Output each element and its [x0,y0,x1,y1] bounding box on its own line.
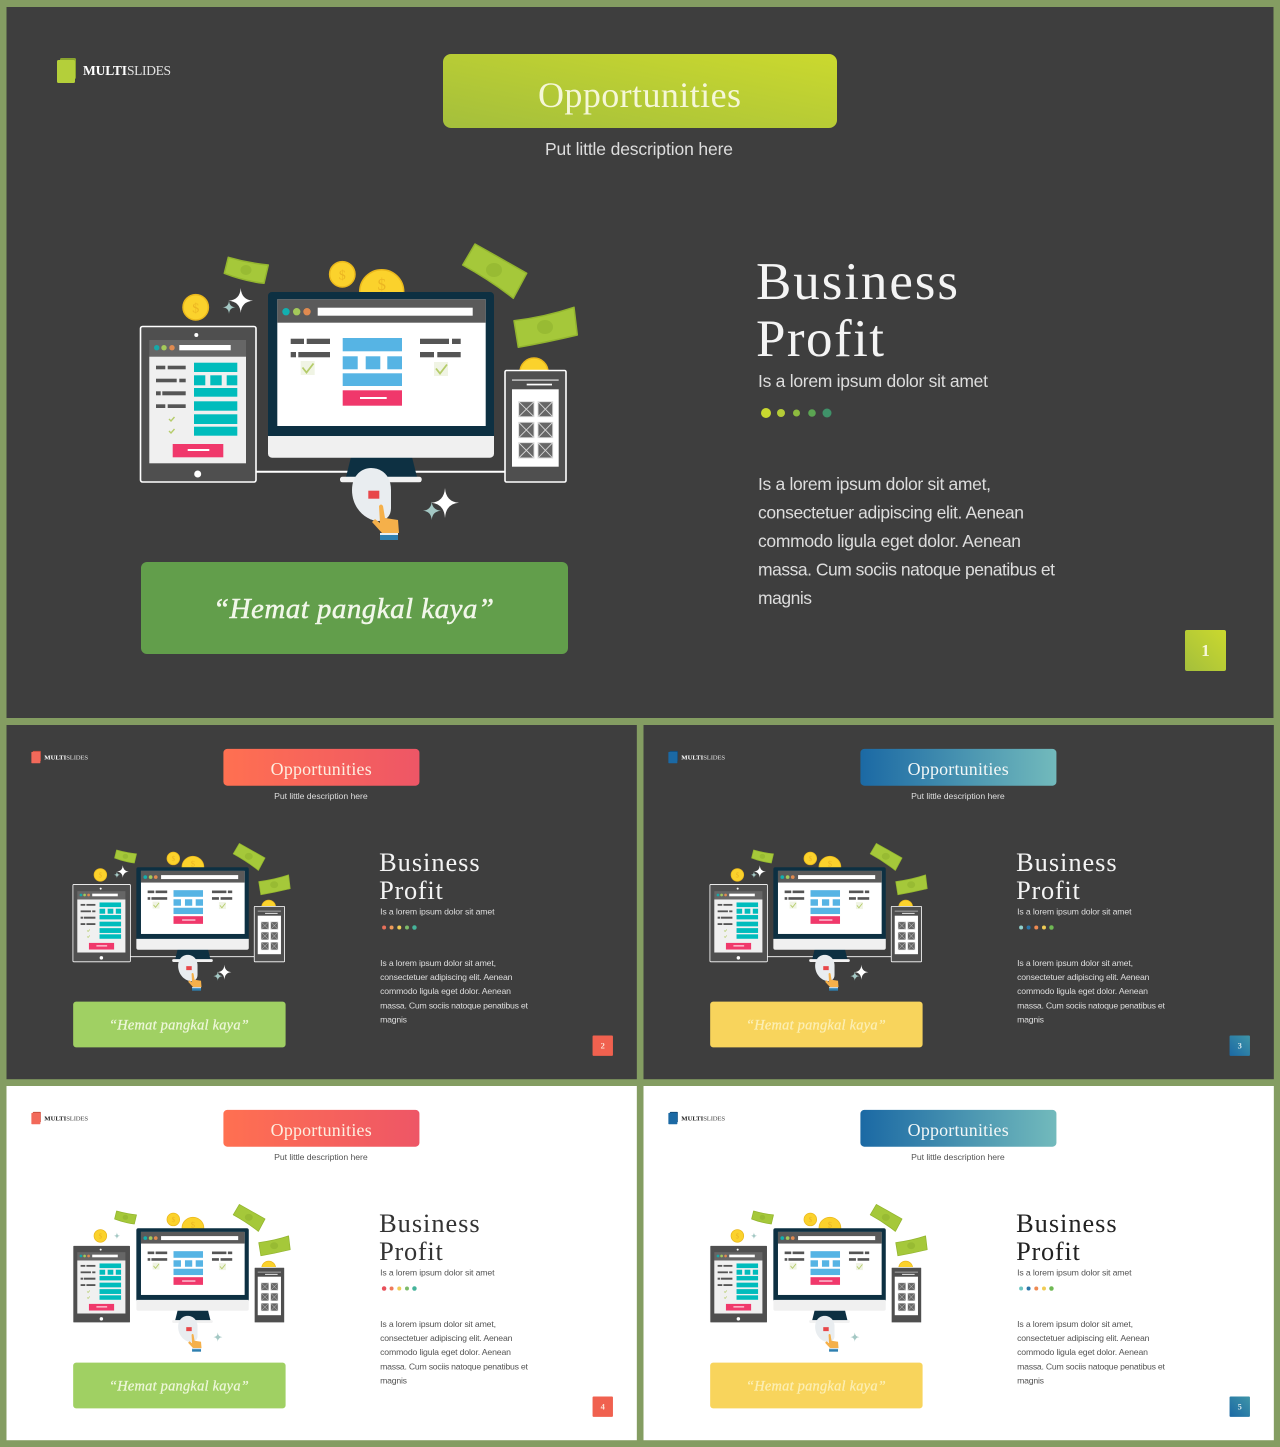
slide 4 page number [593,1396,613,1417]
slide 1 logo: MULTI [83,63,127,78]
slide 2 dots [382,925,417,930]
slide 4 heading: Business [379,1209,480,1238]
slide 2 body text: Is a lorem ipsum dolor sit amet, [380,958,496,968]
slide 5 page number: 5 [1238,1401,1242,1411]
connector lines [256,471,505,473]
slide 3 subtitle: Is a lorem ipsum dolor sit amet [1017,907,1132,917]
slide 5: light blue and yellow theme [644,1086,1274,1440]
slide 1 body text: massa. Cum sociis natoque penatibus et [758,560,1055,580]
slide 3 quote box: “Hemat pangkal kaya” [746,1017,886,1033]
slide 4 illustration [73,1204,290,1352]
slide 2 logo: SLIDES [66,754,88,761]
slide 2 heading: Profit [379,876,443,905]
slide 5 dots [1019,1286,1054,1291]
slide 3 body text [1017,958,1165,1025]
slide 3 logo: SLIDES [703,754,725,761]
slide 1 page number [1185,630,1226,671]
slide 1 heading: Profit [756,310,884,368]
slide 3 page number [1230,1035,1250,1056]
slide 4 page number: 4 [601,1401,606,1411]
slide 2: dark red and green theme [6,725,637,1079]
pointing hand [352,468,399,540]
slide 1 body text: magnis [758,588,812,608]
banknote 1 [224,257,268,283]
coins behind devices: $ [377,275,386,294]
tablet [140,326,256,482]
slide 1 page number: 1 [1201,641,1210,660]
slide 1 logo [57,58,171,83]
slide 1 background [6,7,1274,718]
slide 2 page number: 2 [601,1040,605,1050]
slide 5 heading [1016,1209,1117,1266]
slide 3 background [644,725,1274,1079]
slide 5 title banner: Opportunities [908,1120,1009,1140]
slide 2 body text [380,958,528,1025]
slide 5 quote box: “Hemat pangkal kaya” [746,1378,886,1394]
coins behind devices: $ [339,268,346,284]
slide 5 logo [668,1112,725,1124]
slide 2 subtitle: Is a lorem ipsum dolor sit amet [380,907,495,917]
banknote 2 [463,244,527,298]
illustration: devices with money [140,244,577,540]
slide 1 dots [761,408,832,418]
slide 3 body text: massa. Cum sociis natoque penatibus et [1017,1000,1165,1010]
slide 1 logo: SLIDES [127,63,171,78]
slide 3 logo [668,751,725,763]
slide 2 page number [593,1035,613,1056]
slide 5 body text: consectetuer adipiscing elit. Aenean [1017,1333,1150,1343]
slide 2 quote box [73,1002,286,1047]
slide 2 title banner [223,749,419,786]
slide 3 body text: magnis [1017,1015,1045,1025]
slide 5 body text: magnis [1017,1376,1045,1386]
slide 3 logo: MULTI [681,754,704,761]
slide 2 illustration [73,843,290,991]
slide 5 heading: Profit [1016,1237,1080,1266]
slide 2 body text: massa. Cum sociis natoque penatibus et [380,1000,528,1010]
slide 3: dark blue and yellow theme [644,725,1274,1079]
slide 5 body text: Is a lorem ipsum dolor sit amet, [1017,1319,1133,1329]
slide 2 body text: commodo ligula eget dolor. Aenean [380,986,511,996]
slide 3 page number: 3 [1238,1040,1242,1050]
slide 3 heading [1016,848,1117,905]
slide 5 title banner [860,1110,1056,1147]
slide 4 background [6,1086,637,1440]
slide 3 dots [1019,925,1054,930]
slide 1 title banner: Opportunities [538,75,741,115]
slide 4 body text [380,1319,528,1386]
coins behind devices [183,262,548,386]
slide 5 page number [1230,1396,1250,1417]
slide 2 description: Put little description here [274,791,368,801]
slide 3 title banner [860,749,1056,786]
slide 2 logo: MULTI [44,754,67,761]
slide 4 logo: SLIDES [66,1115,88,1122]
slide 5 body text [1017,1319,1165,1386]
slide 3 description: Put little description here [911,791,1005,801]
slide 4 quote box [73,1363,286,1408]
slide 5 description: Put little description here [911,1152,1005,1162]
slide 5 body text: commodo ligula eget dolor. Aenean [1017,1347,1148,1357]
smartphone [505,370,566,482]
slide 3 body text: consectetuer adipiscing elit. Aenean [1017,972,1150,982]
slide 4: light red and green theme [6,1086,637,1440]
slide 3 body text: Is a lorem ipsum dolor sit amet, [1017,958,1133,968]
slide 1: large dark green theme [6,7,1274,718]
slide 4 description: Put little description here [274,1152,368,1162]
slide 2 heading [379,848,480,905]
slide 2 body text: consectetuer adipiscing elit. Aenean [380,972,513,982]
slide 1 body text: consectetuer adipiscing elit. Aenean [758,502,1024,522]
slide 5 background [644,1086,1274,1440]
slide 2 background [6,725,637,1079]
slide 3 heading: Profit [1016,876,1080,905]
slide 3 quote box [710,1002,923,1047]
slide 1 body text [758,474,1055,608]
slide 1 body text: commodo ligula eget dolor. Aenean [758,531,1021,551]
banknote 3 [514,307,577,347]
slide 1 quote box: “Hemat pangkal kaya” [213,593,494,625]
slide 3 illustration [710,843,927,991]
slide 4 dots [382,1286,417,1291]
desktop monitor [268,292,494,482]
slide 1 description: Put little description here [545,139,733,159]
slide 1 title banner [443,54,837,128]
slide 4 heading [379,1209,480,1266]
slide 4 quote box: “Hemat pangkal kaya” [109,1378,249,1394]
slide 1 quote box [141,562,568,654]
slide 4 logo: MULTI [44,1115,67,1122]
slide 2 heading: Business [379,848,480,877]
slide 4 logo [31,1112,88,1124]
slide 1 heading [756,253,958,368]
sparkles lower [423,488,459,520]
slide 1 heading: Business [756,253,958,311]
slide 5 heading: Business [1016,1209,1117,1238]
sparkles upper [222,288,253,314]
slide 3 title banner: Opportunities [908,759,1009,779]
slide 3 body text: commodo ligula eget dolor. Aenean [1017,986,1148,996]
slide 4 body text: Is a lorem ipsum dolor sit amet, [380,1319,496,1329]
slide 4 body text: commodo ligula eget dolor. Aenean [380,1347,511,1357]
slide 4 title banner: Opportunities [271,1120,372,1140]
slide 2 logo [31,751,88,763]
slide 2 quote box: “Hemat pangkal kaya” [109,1017,249,1033]
slide 5 illustration [710,1204,927,1352]
slide 5 logo: MULTI [681,1115,704,1122]
coins behind devices: $ [192,302,199,316]
slide 2 title banner: Opportunities [271,759,372,779]
slide 4 body text: massa. Cum sociis natoque penatibus et [380,1361,528,1371]
slide 5 body text: massa. Cum sociis natoque penatibus et [1017,1361,1165,1371]
slide 4 body text: consectetuer adipiscing elit. Aenean [380,1333,513,1343]
slide 4 title banner [223,1110,419,1147]
slide 3 heading: Business [1016,848,1117,877]
slide 1 subtitle: Is a lorem ipsum dolor sit amet [758,371,988,391]
slide 5 subtitle: Is a lorem ipsum dolor sit amet [1017,1268,1132,1278]
slide 2 body text: magnis [380,1015,408,1025]
slide 1 body text: Is a lorem ipsum dolor sit amet, [758,474,991,494]
slide 4 body text: magnis [380,1376,408,1386]
slide 4 heading: Profit [379,1237,443,1266]
slide 5 logo: SLIDES [703,1115,725,1122]
slide 4 subtitle: Is a lorem ipsum dolor sit amet [380,1268,495,1278]
slide 5 quote box [710,1363,923,1408]
